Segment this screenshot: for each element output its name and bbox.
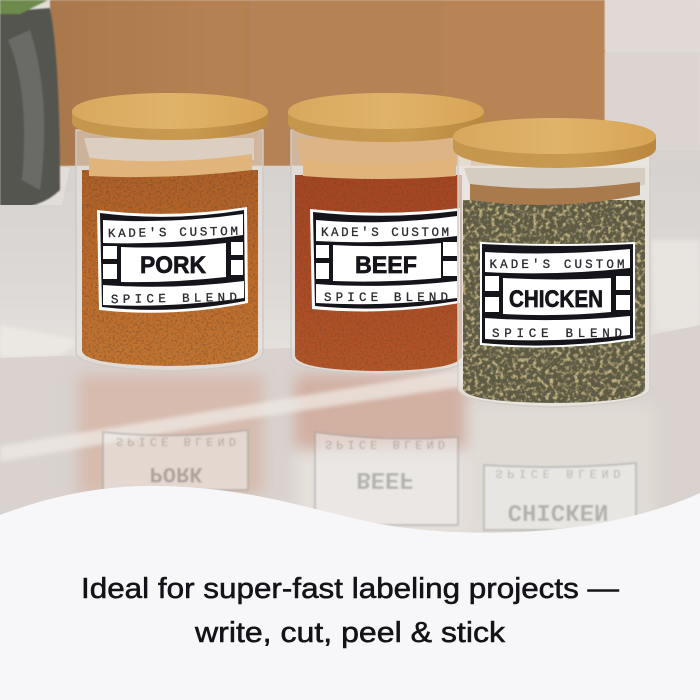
reflection of labels: SPICE BLEND [325, 437, 445, 451]
glass body [76, 130, 263, 371]
inner seal [297, 138, 460, 168]
marble counter [0, 166, 700, 240]
bamboo lid [288, 93, 484, 142]
spice label: CHICKEN [509, 286, 603, 313]
reflection of labels [103, 430, 636, 530]
spice fill [293, 170, 465, 375]
spice fill [80, 165, 260, 370]
reflection of labels: BEEF [356, 465, 414, 492]
wooden board [50, 0, 605, 166]
reflection of labels: CHICKEN [508, 497, 608, 524]
reflection of labels: PORK [150, 461, 203, 486]
bamboo lid [72, 93, 268, 140]
wavy caption panel [0, 486, 700, 700]
glass body [291, 130, 470, 374]
light streak on marble [0, 368, 480, 462]
spice label: KADE'S CUSTOM [490, 258, 624, 272]
spice label: SPICE BLEND [492, 327, 622, 341]
jar: pork [72, 93, 268, 371]
jar: beef [288, 93, 484, 375]
reflection of labels: SPICE BLEND [496, 466, 620, 480]
caption text: Ideal for super-fast labeling projects — [81, 573, 620, 605]
glossy reflection area [0, 325, 700, 515]
spice label: BEEF [355, 252, 417, 279]
spice label [97, 207, 248, 313]
reflection of labels: SPICE BLEND [116, 434, 236, 448]
bamboo lid [453, 118, 656, 168]
spice label [480, 242, 635, 348]
caption text: write, cut, peel & stick [194, 617, 506, 649]
spice label: KADE'S CUSTOM [108, 225, 238, 241]
wall tiles [605, 0, 700, 150]
spice label: PORK [140, 252, 207, 279]
plant pot [0, 0, 60, 209]
spice label: SPICE BLEND [111, 291, 237, 307]
spice label [310, 208, 460, 311]
inner seal [84, 138, 254, 165]
background photo: kitchen wall and marble counter [0, 0, 700, 540]
jar: chicken [453, 118, 656, 407]
inner seal [464, 168, 645, 192]
caption text [81, 573, 620, 649]
spice label: KADE'S CUSTOM [321, 226, 449, 240]
spice fill [460, 195, 650, 405]
glass body [458, 155, 650, 407]
spice label: SPICE BLEND [324, 291, 448, 305]
